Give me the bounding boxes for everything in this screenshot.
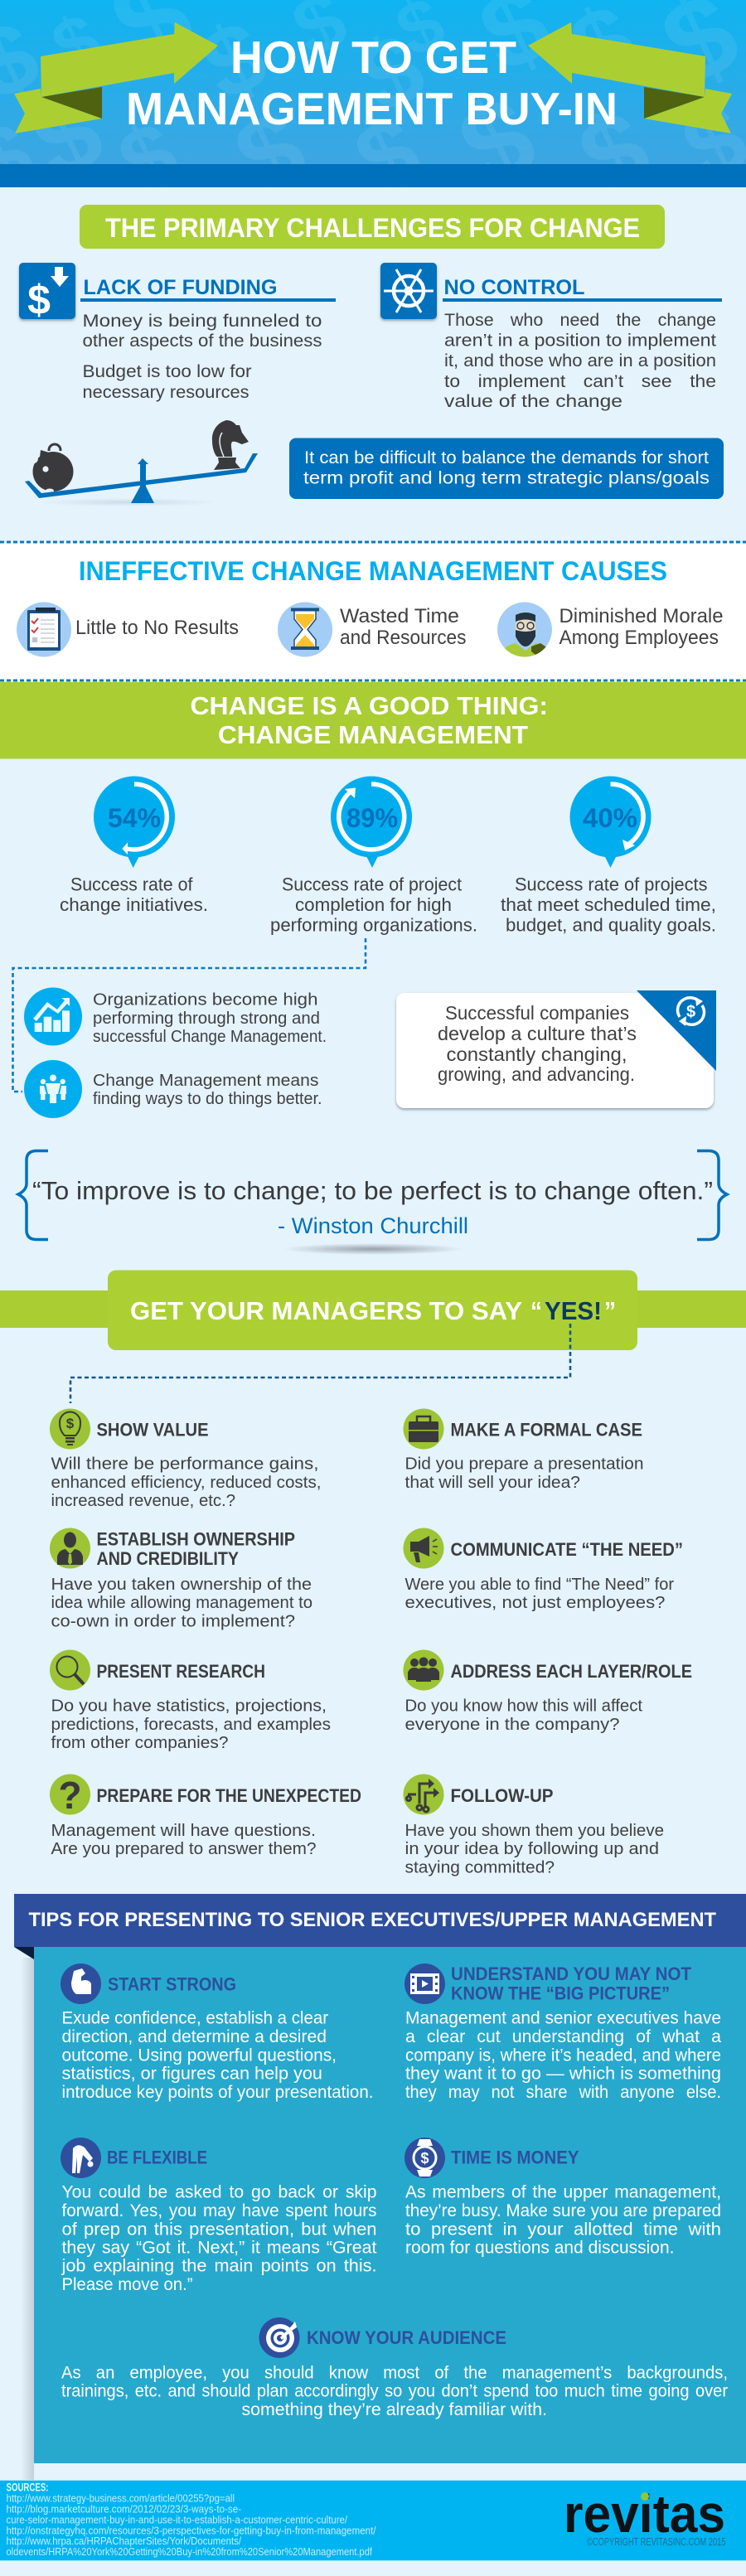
benefit: organizations become high performing: Organizations become high bbox=[93, 991, 318, 1010]
connector: dashed line from stats to organizations bbox=[13, 938, 366, 1092]
tip: big picture: a clear cut understanding of what a bbox=[405, 2027, 721, 2046]
tip: start strong bbox=[61, 1963, 373, 2102]
tip: be flexible: job explaining the main points on this. bbox=[61, 2256, 376, 2276]
text: 89% caption: completion for high bbox=[295, 894, 452, 915]
callout: successful companies: growing, and advancing. bbox=[438, 1063, 635, 1085]
heading band: change is a good thing: CHANGE MANAGEMENT bbox=[218, 720, 528, 749]
icon: group of people bbox=[403, 1649, 444, 1691]
tip: big picture: UNDERSTAND YOU MAY NOT bbox=[451, 1963, 692, 1984]
benefit: finding ways to do things better: finding ways to do things better. bbox=[93, 1090, 322, 1108]
logo: revitas: revitas bbox=[564, 2484, 725, 2544]
item: prepare for the unexpected: Are you prepared to answer them? bbox=[51, 1840, 317, 1858]
header banner bbox=[0, 0, 746, 220]
stat: 89%: 89% bbox=[346, 803, 398, 833]
text: 40% caption bbox=[501, 874, 716, 935]
tip: start strong: statistics, or figures can help you bbox=[61, 2064, 322, 2084]
header banner: $ bbox=[343, 11, 440, 135]
header banner: $ bbox=[104, 101, 193, 215]
text: no control detail: Those who need the change bbox=[444, 311, 716, 330]
item: address each layer: ADDRESS EACH LAYER/ROLE bbox=[451, 1661, 692, 1682]
sources: http://www.hrpa.ca/HRPAChapterSites/York/Documents/ bbox=[7, 2535, 241, 2547]
tip: know your audience: As an employee, you should know most of the management’s backgrounds, bbox=[61, 2364, 728, 2382]
callout: balance short and long term: term profit and long term strategic plans/goals bbox=[303, 469, 710, 487]
title: HOW TO GET bbox=[230, 31, 516, 83]
text: no control detail: aren’t in a position to implement bbox=[444, 332, 716, 350]
item: follow-up: FOLLOW-UP bbox=[451, 1785, 554, 1806]
heading: primary challenges: THE PRIMARY CHALLENGES FOR CHANGE bbox=[105, 213, 640, 243]
corner ribbon with icon bbox=[637, 990, 716, 1071]
tip: be flexible: forward. Yes, you may have spent hours bbox=[61, 2201, 376, 2220]
item: follow-up: in your idea by following up and bbox=[404, 1840, 659, 1858]
tip: big picture: Management and senior executives have bbox=[405, 2009, 721, 2027]
text: 40% caption: that meet scheduled time, bbox=[501, 894, 716, 915]
tip: big picture: they want it to go — which is something bbox=[405, 2064, 721, 2084]
text: little to no results: Little to No Results bbox=[75, 617, 239, 639]
icon: watch with dollar bbox=[404, 2138, 445, 2178]
text: no control detail bbox=[444, 311, 716, 411]
item: communicate the need: COMMUNICATE “THE NEED” bbox=[451, 1539, 683, 1560]
heading: lack of funding: LACK OF FUNDING bbox=[83, 276, 277, 299]
icon: team of people bbox=[24, 1060, 82, 1118]
text: 89% caption: Success rate of project bbox=[282, 874, 462, 895]
item: make a formal case bbox=[403, 1409, 643, 1492]
tip: big picture: they may not share with anyone else. bbox=[405, 2083, 721, 2102]
icon: flow arrows bbox=[403, 1774, 444, 1815]
text: no control detail: it, and those who are in a position bbox=[444, 351, 716, 370]
item: communicate the need bbox=[403, 1528, 683, 1612]
icon: hourglass bbox=[278, 602, 332, 656]
heading: primary challenges bbox=[80, 205, 665, 249]
tip: be flexible: You could be asked to go back or skip bbox=[61, 2183, 376, 2201]
icon: chess knight bbox=[212, 420, 249, 470]
tip: time is money: As members of the upper management, bbox=[405, 2183, 721, 2201]
footer bbox=[0, 2480, 746, 2561]
text: diminished morale: Diminished Morale bbox=[559, 605, 723, 627]
icon: flexed arm bbox=[61, 1963, 101, 2004]
tip: start strong: Exude confidence, establish a clear bbox=[61, 2009, 328, 2027]
item: show value: SHOW VALUE bbox=[96, 1419, 209, 1441]
item: show value: increased revenue, etc.? bbox=[51, 1492, 235, 1510]
tip: time is money: to present in your allotted time with bbox=[405, 2220, 721, 2239]
text: wasted time: Wasted Time bbox=[340, 605, 459, 627]
heading: tips: TIPS FOR PRESENTING TO SENIOR EXECUTIVES/UPPER MANAGEMENT bbox=[28, 1909, 716, 1931]
icon: megaphone bbox=[403, 1528, 444, 1568]
arrow ribbon: left bbox=[14, 22, 218, 133]
item: establish ownership: idea while allowing management to bbox=[51, 1594, 312, 1612]
stat: 89% bbox=[270, 776, 477, 935]
item: present research bbox=[50, 1649, 331, 1752]
text: lack of funding detail: Budget is too low for bbox=[83, 362, 252, 381]
panel: ineffective change management causes bbox=[0, 542, 746, 681]
text: 40% caption: Success rate of projects bbox=[515, 874, 708, 895]
item: communicate the need: Were you able to find “The Need” for bbox=[404, 1576, 674, 1594]
text: lack of funding detail bbox=[83, 312, 322, 402]
header banner: $ bbox=[186, 0, 283, 123]
corner ribbon with icon: $ bbox=[686, 1003, 695, 1021]
icon: target bbox=[259, 2317, 300, 2358]
illustration: seesaw with piggy bank and chess knight bbox=[25, 420, 258, 506]
item: follow-up: Have you shown them you believe bbox=[404, 1822, 664, 1840]
icon: light bulb: $ bbox=[66, 1416, 75, 1431]
item: prepare for the unexpected: Management will have questions. bbox=[51, 1822, 316, 1840]
tip: start strong: outcome. Using powerful questions, bbox=[61, 2046, 337, 2065]
header banner: $ bbox=[217, 85, 323, 220]
arrow ribbon: right bbox=[528, 22, 732, 133]
heading band: change is a good thing: CHANGE IS A GOOD THING: bbox=[191, 691, 548, 720]
icon: magnifying glass bbox=[50, 1649, 90, 1691]
sources: SOURCES: bbox=[7, 2482, 48, 2493]
item: make a formal case: MAKE A FORMAL CASE bbox=[451, 1419, 642, 1441]
item: follow-up: staying committed? bbox=[404, 1858, 555, 1876]
item: establish ownership: AND CREDIBILITY bbox=[96, 1548, 239, 1569]
item: communicate the need: executives, not just employees? bbox=[404, 1594, 665, 1612]
text: 89% caption: performing organizations. bbox=[270, 915, 477, 935]
item: establish ownership: Have you taken ownership of the bbox=[51, 1576, 312, 1594]
icon: person with tie bbox=[50, 1528, 90, 1568]
item: address each layer: everyone in the company? bbox=[404, 1716, 620, 1734]
item: address each layer: Do you know how this will affect bbox=[404, 1697, 642, 1716]
tip: big picture bbox=[404, 1963, 721, 2102]
heading: causes: INEFFECTIVE CHANGE MANAGEMENT CAUSES bbox=[79, 556, 667, 586]
benefit: organizations become high performing bbox=[24, 988, 327, 1046]
tip: be flexible: they say “Got it. Next,” it means “Great bbox=[61, 2238, 377, 2258]
connector: dashed line from yes to list bbox=[70, 1324, 570, 1403]
icon: dollar with arrow: $ bbox=[27, 277, 51, 323]
tip: be flexible: Please move on.” bbox=[61, 2275, 193, 2294]
item: show value bbox=[50, 1409, 322, 1510]
tip: time is money: TIME IS MONEY bbox=[451, 2147, 579, 2168]
sources: cure-selor-management-buy-in-and-use-it-to-establish-a-customer-centric-culture/ bbox=[7, 2515, 347, 2526]
quote bbox=[18, 1150, 727, 1255]
text: 89% caption bbox=[270, 874, 477, 935]
item: address each layer bbox=[403, 1649, 692, 1734]
tip: know your audience bbox=[61, 2317, 728, 2419]
item: make a formal case: that will sell your idea? bbox=[404, 1474, 580, 1492]
item: present research: PRESENT RESEARCH bbox=[96, 1661, 265, 1682]
text: 54% caption: change initiatives. bbox=[60, 894, 208, 915]
tip: big picture: company is, where it’s headed, and where bbox=[405, 2046, 721, 2065]
tip: know your audience: KNOW YOUR AUDIENCE bbox=[307, 2327, 506, 2348]
stat: 54% bbox=[60, 776, 208, 915]
tip: know your audience: something they’re already familiar with. bbox=[242, 2400, 547, 2419]
item: show value: Will there be performance gains, bbox=[51, 1455, 318, 1474]
item: present research: from other companies? bbox=[51, 1734, 229, 1752]
icon: bearded man bbox=[497, 602, 552, 658]
callout: successful companies: constantly changing, bbox=[446, 1043, 627, 1065]
text: no control detail: to implement can’t see the bbox=[444, 372, 716, 391]
tip: start strong: introduce key points of your presentation. bbox=[61, 2083, 373, 2102]
callout: successful companies: Successful companies bbox=[445, 1002, 629, 1024]
text: wasted time bbox=[340, 605, 466, 649]
item: follow-up bbox=[403, 1774, 664, 1876]
stat: 40%: 40% bbox=[583, 803, 637, 833]
text: 54% caption: Success rate of bbox=[70, 874, 193, 895]
item: make a formal case: Did you prepare a presentation bbox=[404, 1455, 643, 1474]
icon: film strip bbox=[404, 1963, 445, 2004]
text: no control detail: value of the change bbox=[444, 392, 622, 411]
tip: time is money: room for questions and discussion. bbox=[405, 2238, 675, 2258]
title: MANAGEMENT BUY-IN bbox=[126, 83, 618, 134]
header banner: $ bbox=[339, 94, 436, 218]
stat: 54%: 54% bbox=[108, 803, 161, 833]
tip: time is money: they’re busy. Make sure you are prepared bbox=[405, 2201, 721, 2220]
icon: clipboard bbox=[17, 602, 71, 656]
text: wasted time: and Resources bbox=[340, 627, 466, 649]
quote text: “To improve is to change; to be perfect is to change often.” bbox=[32, 1176, 713, 1205]
item: prepare for the unexpected bbox=[50, 1774, 361, 1858]
benefit: finding ways to do things better: Change Management means bbox=[93, 1072, 318, 1090]
item: present research: predictions, forecasts, and examples bbox=[51, 1716, 331, 1734]
header banner: $ bbox=[41, 0, 113, 90]
item: establish ownership: ESTABLISH OWNERSHIP bbox=[96, 1528, 295, 1550]
right brace bbox=[697, 1150, 727, 1240]
sources bbox=[7, 2482, 376, 2558]
text: lack of funding detail: necessary resources bbox=[83, 383, 249, 402]
header banner: $ bbox=[440, 69, 554, 215]
heading: no control: NO CONTROL bbox=[444, 276, 585, 299]
heading band: get your managers to say yes bbox=[0, 1270, 746, 1350]
icon: piggy bank bbox=[30, 444, 73, 492]
panel: tips for presenting bbox=[14, 1894, 746, 2481]
header banner: $ bbox=[561, 85, 667, 220]
callout: balance short and long term: It can be difficult to balance the demands for short bbox=[304, 448, 709, 467]
item: establish ownership: co-own in order to implement? bbox=[51, 1613, 295, 1631]
callout: balance short and long term bbox=[289, 438, 724, 499]
heading band: get your managers to say yes: ” bbox=[604, 1296, 616, 1325]
panel: lack of funding bbox=[19, 263, 336, 402]
icon: dollar with arrow bbox=[19, 263, 75, 323]
icon: growth chart bbox=[24, 988, 82, 1046]
text: diminished morale: Among Employees bbox=[559, 627, 719, 649]
benefit: finding ways to do things better bbox=[24, 1060, 322, 1118]
callout: successful companies bbox=[396, 990, 716, 1108]
sources: http://onstrategyhq.com/resources/3-perspectives-for-getting-buy-in-from-management/ bbox=[7, 2525, 376, 2536]
heading band: get your managers to say yes: YES! bbox=[545, 1296, 602, 1325]
benefit: organizations become high performing: successful Change Management. bbox=[93, 1028, 327, 1046]
header banner: $ bbox=[14, 69, 120, 204]
callout: successful companies: develop a culture that’s bbox=[438, 1023, 637, 1044]
icon: watch with dollar: $ bbox=[420, 2150, 429, 2167]
text: 40% caption: budget, and quality goals. bbox=[506, 915, 716, 935]
tip: be flexible: BE FLEXIBLE bbox=[107, 2147, 207, 2168]
tip: start strong: START STRONG bbox=[108, 1974, 236, 1994]
sources: http://blog.marketculture.com/2012/02/23/3-ways-to-se- bbox=[7, 2503, 241, 2515]
tip: time is money bbox=[404, 2138, 721, 2258]
icon: light bulb bbox=[50, 1409, 90, 1449]
item: establish ownership bbox=[50, 1528, 312, 1631]
item: prepare for the unexpected: PREPARE FOR THE UNEXPECTED bbox=[96, 1785, 361, 1806]
tip: start strong: direction, and determine a desired bbox=[61, 2027, 327, 2046]
icon: question mark bbox=[50, 1774, 90, 1817]
heading band: get your managers to say yes: “ bbox=[530, 1296, 542, 1325]
text: 54% caption bbox=[60, 874, 208, 915]
title bbox=[126, 31, 618, 134]
left brace bbox=[18, 1150, 48, 1240]
stat: 40% bbox=[501, 776, 716, 935]
tip: be flexible: of prep on this presentation, but when bbox=[61, 2220, 376, 2239]
text: lack of funding detail: Money is being funneled to bbox=[83, 312, 322, 331]
text: lack of funding detail: other aspects of the business bbox=[83, 332, 322, 351]
tip: know your audience: trainings, etc. and should plan accordingly so you don’t spend too much time going over bbox=[61, 2382, 728, 2400]
icon: question mark: ? bbox=[58, 1774, 82, 1817]
heading band: change is a good thing bbox=[0, 682, 746, 759]
sources: http://www.strategy-business.com/article/00255?pg=all bbox=[7, 2493, 235, 2505]
benefit: organizations become high performing: performing through strong and bbox=[93, 1010, 320, 1028]
icon: ship wheel bbox=[380, 263, 437, 319]
icon: bending figure bbox=[61, 2138, 101, 2178]
text: diminished morale bbox=[559, 605, 723, 649]
item: present research: Do you have statistics, projections, bbox=[51, 1697, 327, 1716]
tip: big picture: KNOW THE “BIG PICTURE” bbox=[451, 1983, 670, 2004]
icon: briefcase bbox=[403, 1409, 444, 1449]
heading band: get your managers to say yes: GET YOUR MANAGERS TO SAY bbox=[130, 1296, 522, 1325]
tip: be flexible bbox=[61, 2138, 377, 2294]
panel: no control bbox=[380, 263, 722, 411]
item: show value: enhanced efficiency, reduced costs, bbox=[51, 1474, 322, 1492]
sources: oldevents/HRPA%20York%20Getting%20Buy-in%20from%20Senior%20Management.pdf bbox=[7, 2546, 372, 2558]
attribution: - Winston Churchill bbox=[278, 1213, 468, 1238]
